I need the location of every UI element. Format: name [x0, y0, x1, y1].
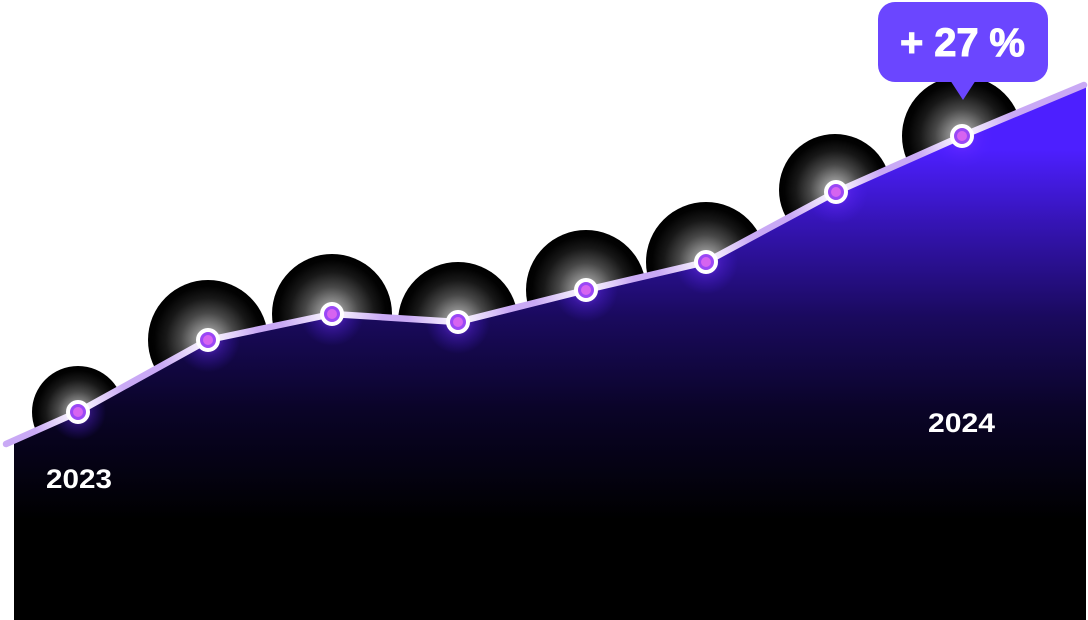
- callout: +27%: [878, 2, 1048, 100]
- data point markers: [68, 126, 972, 422]
- callout: +27%: + 27 %: [900, 21, 1025, 65]
- label: 2023: 2023: [46, 464, 112, 494]
- label: 2024: 2024: [928, 408, 995, 438]
- dark radial halos behind the line: [32, 76, 1022, 458]
- trend line: [6, 85, 1084, 444]
- purple glows under data points: [56, 133, 978, 438]
